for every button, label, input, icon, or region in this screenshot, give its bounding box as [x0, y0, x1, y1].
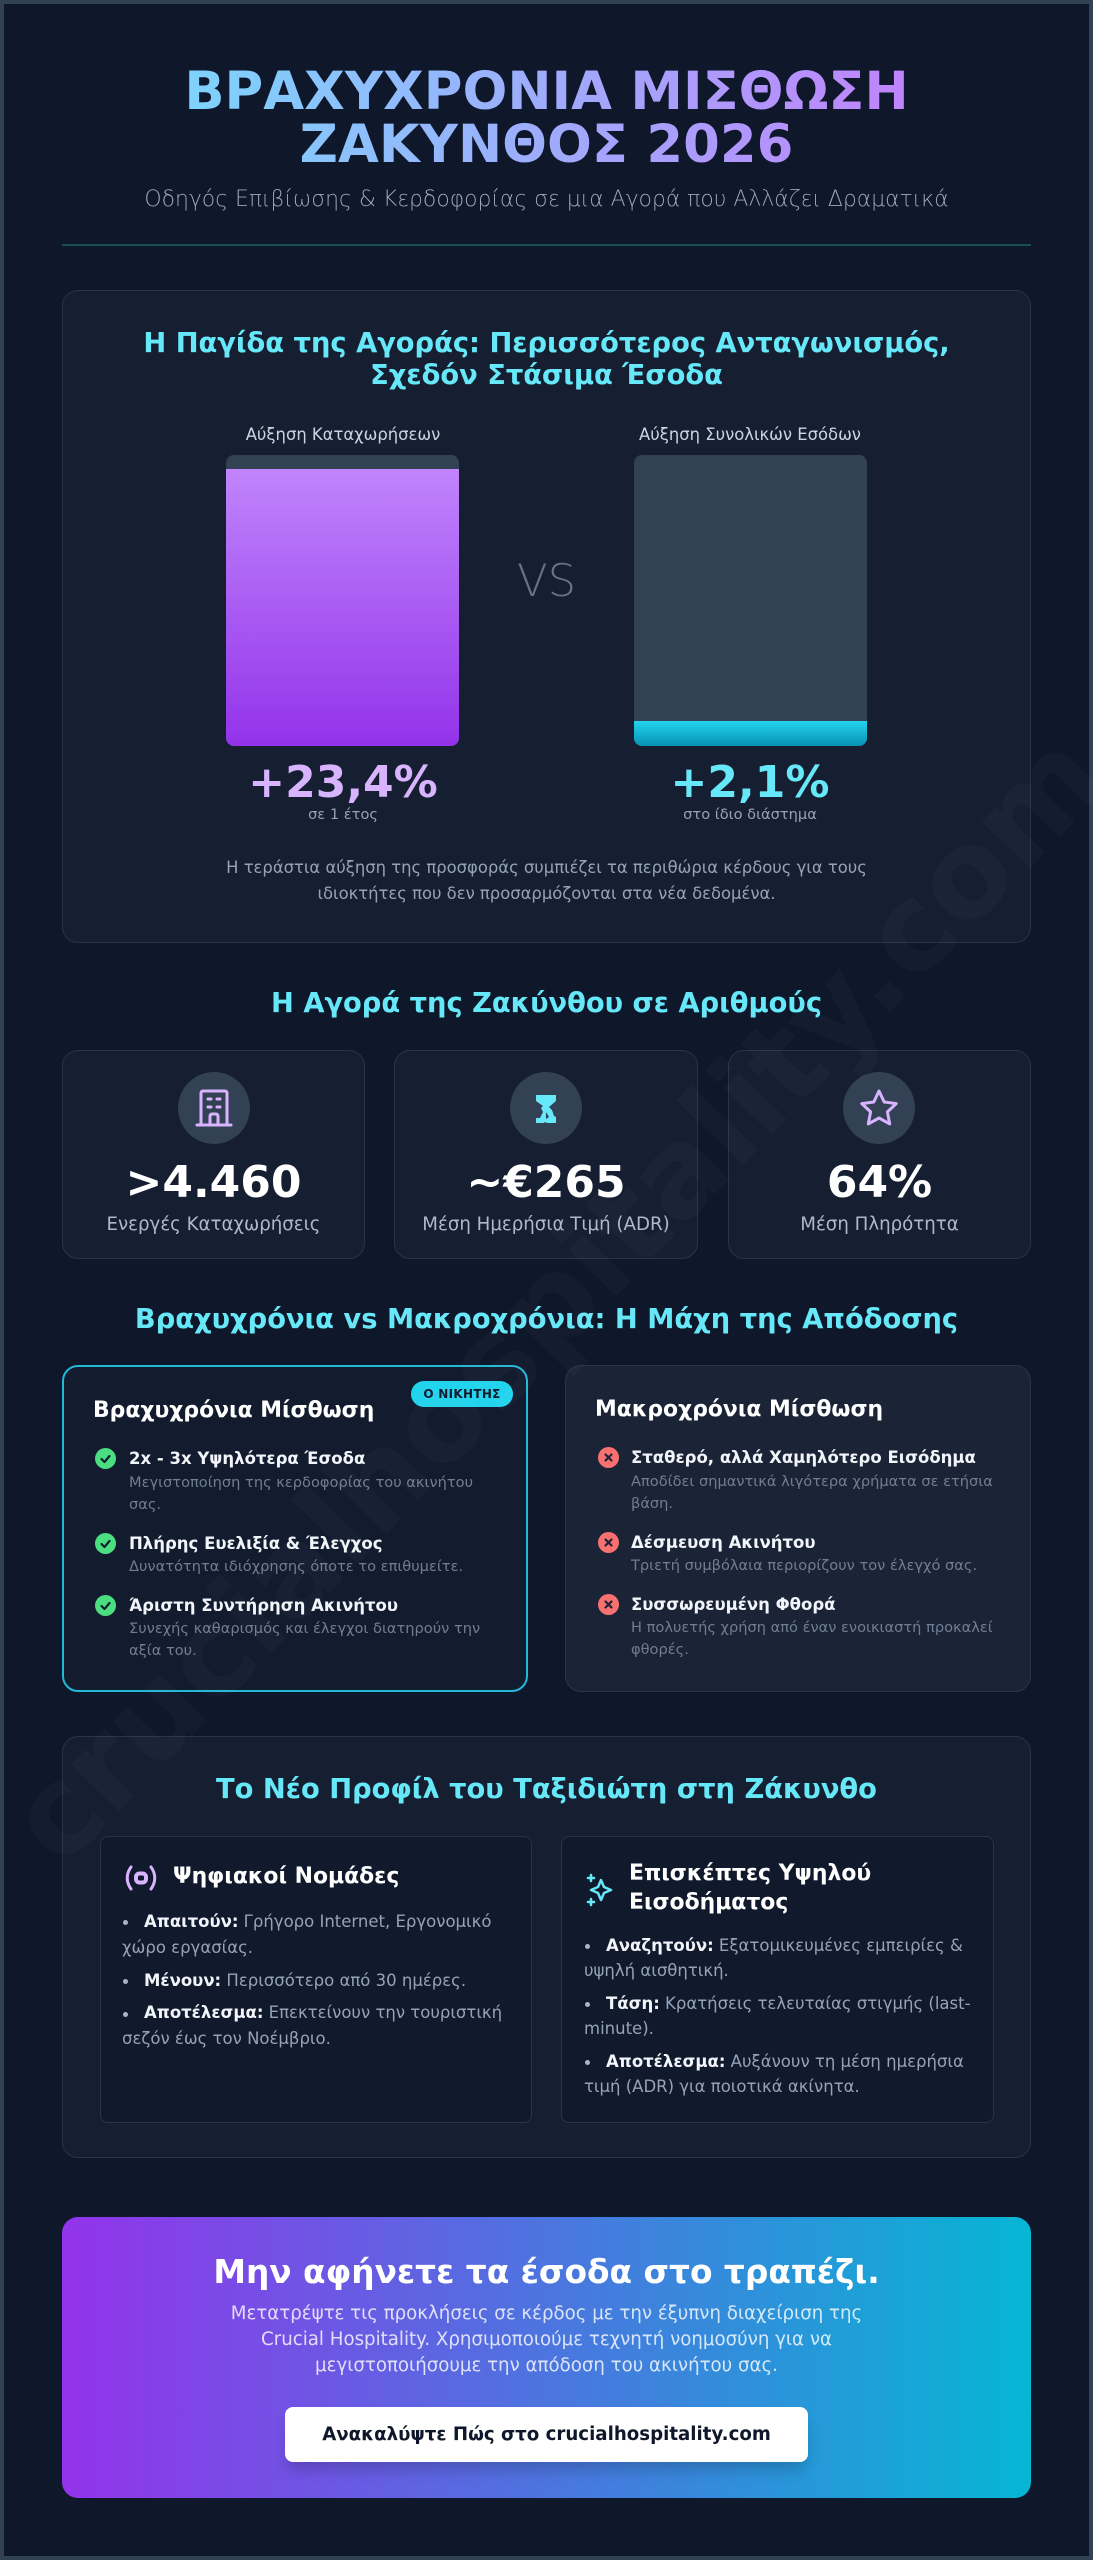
title	[184, 61, 909, 175]
card title: Εισοδήματος	[629, 1890, 788, 1915]
panel: market trap	[62, 290, 1031, 943]
icon: hourglass coin	[510, 1072, 582, 1144]
title: ΖΑΚΥΝΘΟΣ 2026	[300, 114, 793, 175]
CTA text: Crucial Hospitality. Χρησιμοποιούμε τεχνητή νοημοσύνη για να	[261, 2329, 832, 2350]
CTA button	[285, 2407, 808, 2462]
label: occupancy: Μέση Πληρότητα	[800, 1214, 959, 1235]
VS label: VS	[517, 554, 576, 607]
icon: building	[178, 1072, 250, 1144]
list: Αναζητούν: Εξατομικευμένες εμπειρίες &	[606, 1936, 963, 1955]
CTA button: Ανακαλύψτε Πώς στο crucialhospitality.com	[322, 2424, 771, 2445]
number: occupancy: 64%	[827, 1157, 932, 1208]
item: maintenance: Άριστη Συντήρηση Ακινήτου	[129, 1596, 398, 1615]
heading: traveler profile: Το Νέο Προφίλ του Ταξιδιώτη στη Ζάκυνθο	[216, 1774, 877, 1805]
description text	[226, 858, 867, 903]
icon: broadcast	[126, 1865, 156, 1891]
title: ΒΡΑΧΥΧΡΟΝΙΑ ΜΙΣΘΩΣΗ	[184, 61, 909, 122]
heading: market in numbers: Η Αγορά της Ζακύνθου σε Αριθμούς	[271, 988, 822, 1019]
icon: sparkles	[586, 1874, 612, 1906]
item: commitment: Δέσμευση Ακινήτου	[631, 1533, 816, 1552]
winner badge: Ο ΝΙΚΗΤΗΣ	[423, 1387, 501, 1401]
stat card: occupancy	[728, 1050, 1031, 1259]
CTA text: μεγιστοποιήσουμε την απόδοση του ακινήτου σας.	[315, 2355, 778, 2376]
list: Μένουν: Περισσότερο από 30 ημέρες.	[144, 1971, 466, 1990]
bar label: revenue: Αύξηση Συνολικών Εσόδων	[639, 425, 861, 444]
description text: Η τεράστια αύξηση της προσφοράς συμπιέζει τα περιθώρια κέρδους για τους	[226, 858, 867, 877]
panel: long-term rental	[565, 1365, 1031, 1692]
item: commitment	[598, 1532, 977, 1574]
stat: revenue +2,1%: +2,1%	[671, 757, 829, 808]
item: flexibility: Πλήρης Ευελιξία & Έλεγχος	[129, 1534, 383, 1553]
CTA heading: Μην αφήνετε τα έσοδα στο τραπέζι.	[213, 2253, 880, 2291]
label: ADR: Μέση Ημερήσια Τιμή (ADR)	[422, 1214, 670, 1235]
item: flexibility: Δυνατότητα ιδιόχρησης όποτε το επιθυμείτε.	[129, 1558, 463, 1575]
list	[122, 1912, 502, 2048]
label: listings: Ενεργές Καταχωρήσεις	[107, 1214, 320, 1235]
note: one year: σε 1 έτος	[308, 806, 378, 823]
winner badge	[411, 1381, 513, 1407]
item: lower income: Σταθερό, αλλά Χαμηλότερο Εισόδημα	[631, 1448, 976, 1467]
bar chart: revenue growth	[634, 455, 867, 746]
CTA text	[231, 2303, 862, 2376]
bar label: listings: Αύξηση Καταχωρήσεων	[246, 425, 440, 444]
item: maintenance: Συνεχής καθαρισμός και έλεγχοι διατηρούν την	[129, 1620, 480, 1637]
list	[584, 1936, 971, 2096]
list: Αποτέλεσμα: Επεκτείνουν την τουριστική	[144, 2003, 502, 2022]
item: wear: Συσσωρευμένη Φθορά	[631, 1595, 836, 1614]
heading: market trap: Σχεδόν Στάσιμα Έσοδα	[370, 360, 723, 391]
subtitle: Οδηγός Επιβίωσης & Κερδοφορίας σε μια Αγορά που Αλλάζει Δραματικά	[144, 187, 949, 212]
list: τιμή (ADR) για ποιοτικά ακίνητα.	[584, 2077, 860, 2096]
panel: call to action	[62, 2217, 1031, 2498]
description text: ιδιοκτήτες που δεν προσαρμόζονται στα νέα δεδομένα.	[317, 884, 776, 903]
item: maintenance	[95, 1595, 480, 1659]
card: high-income visitors	[561, 1836, 994, 2123]
stat card: listings	[62, 1050, 365, 1259]
card title: Επισκέπτες Υψηλού	[629, 1861, 871, 1886]
card title	[629, 1861, 871, 1915]
list: Τάση: Κρατήσεις τελευταίας στιγμής (last-	[606, 1994, 971, 2013]
heading: market trap: Η Παγίδα της Αγοράς: Περισσότερος Ανταγωνισμός,	[143, 328, 950, 359]
item: maintenance: αξία του.	[129, 1642, 197, 1659]
heading: market trap	[143, 328, 950, 391]
panel: traveler profile	[62, 1736, 1031, 2158]
number: ADR: ~€265	[466, 1157, 626, 1208]
item: lower income	[598, 1447, 993, 1512]
list: υψηλή αισθητική.	[584, 1961, 729, 1980]
card title: Βραχυχρόνια Μίσθωση	[93, 1398, 374, 1423]
item: wear: Η πολυετής χρήση από έναν ενοικιαστή προκαλεί	[631, 1619, 993, 1636]
item: flexibility	[95, 1533, 463, 1575]
bar chart: listings growth	[226, 455, 459, 746]
note: same period: στο ίδιο διάστημα	[683, 806, 817, 823]
card: digital nomads	[100, 1836, 532, 2123]
CTA text: Μετατρέψτε τις προκλήσεις σε κέρδος με την έξυπνη διαχείριση της	[231, 2303, 862, 2324]
item: wear: φθορές.	[631, 1641, 689, 1658]
number: listings: >4.460	[125, 1157, 302, 1208]
panel: short-term rental	[62, 1365, 528, 1692]
item: higher revenue: σας.	[129, 1496, 161, 1513]
stat: listings +23,4%: +23,4%	[248, 757, 438, 808]
card title: Ψηφιακοί Νομάδες	[173, 1864, 399, 1889]
icon: star	[843, 1072, 915, 1144]
heading: short vs long term: Βραχυχρόνια vs Μακροχρόνια: Η Μάχη της Απόδοσης	[135, 1304, 958, 1335]
stat card: ADR	[394, 1050, 698, 1259]
item: higher revenue	[95, 1448, 473, 1513]
stats row	[62, 1050, 1031, 1259]
list: Αποτέλεσμα: Αυξάνουν τη μέση ημερήσια	[606, 2052, 964, 2071]
item: lower income: Αποδίδει σημαντικά λιγότερα χρήματα σε ετήσια	[631, 1473, 993, 1490]
card title: Μακροχρόνια Μίσθωση	[595, 1397, 883, 1422]
list: minute).	[584, 2019, 654, 2038]
item: wear	[598, 1594, 993, 1658]
list: σεζόν έως τον Νοέμβριο.	[122, 2029, 331, 2048]
list: χώρο εργασίας.	[122, 1938, 253, 1957]
item: lower income: βάση.	[631, 1495, 673, 1512]
list: Απαιτούν: Γρήγορο Internet, Εργονομικό	[144, 1912, 491, 1931]
item: higher revenue: Μεγιστοποίηση της κερδοφορίας του ακινήτου	[129, 1474, 473, 1491]
item: higher revenue: 2x - 3x Υψηλότερα Έσοδα	[129, 1449, 365, 1468]
item: commitment: Τριετή συμβόλαια περιορίζουν τον έλεγχό σας.	[631, 1557, 977, 1574]
